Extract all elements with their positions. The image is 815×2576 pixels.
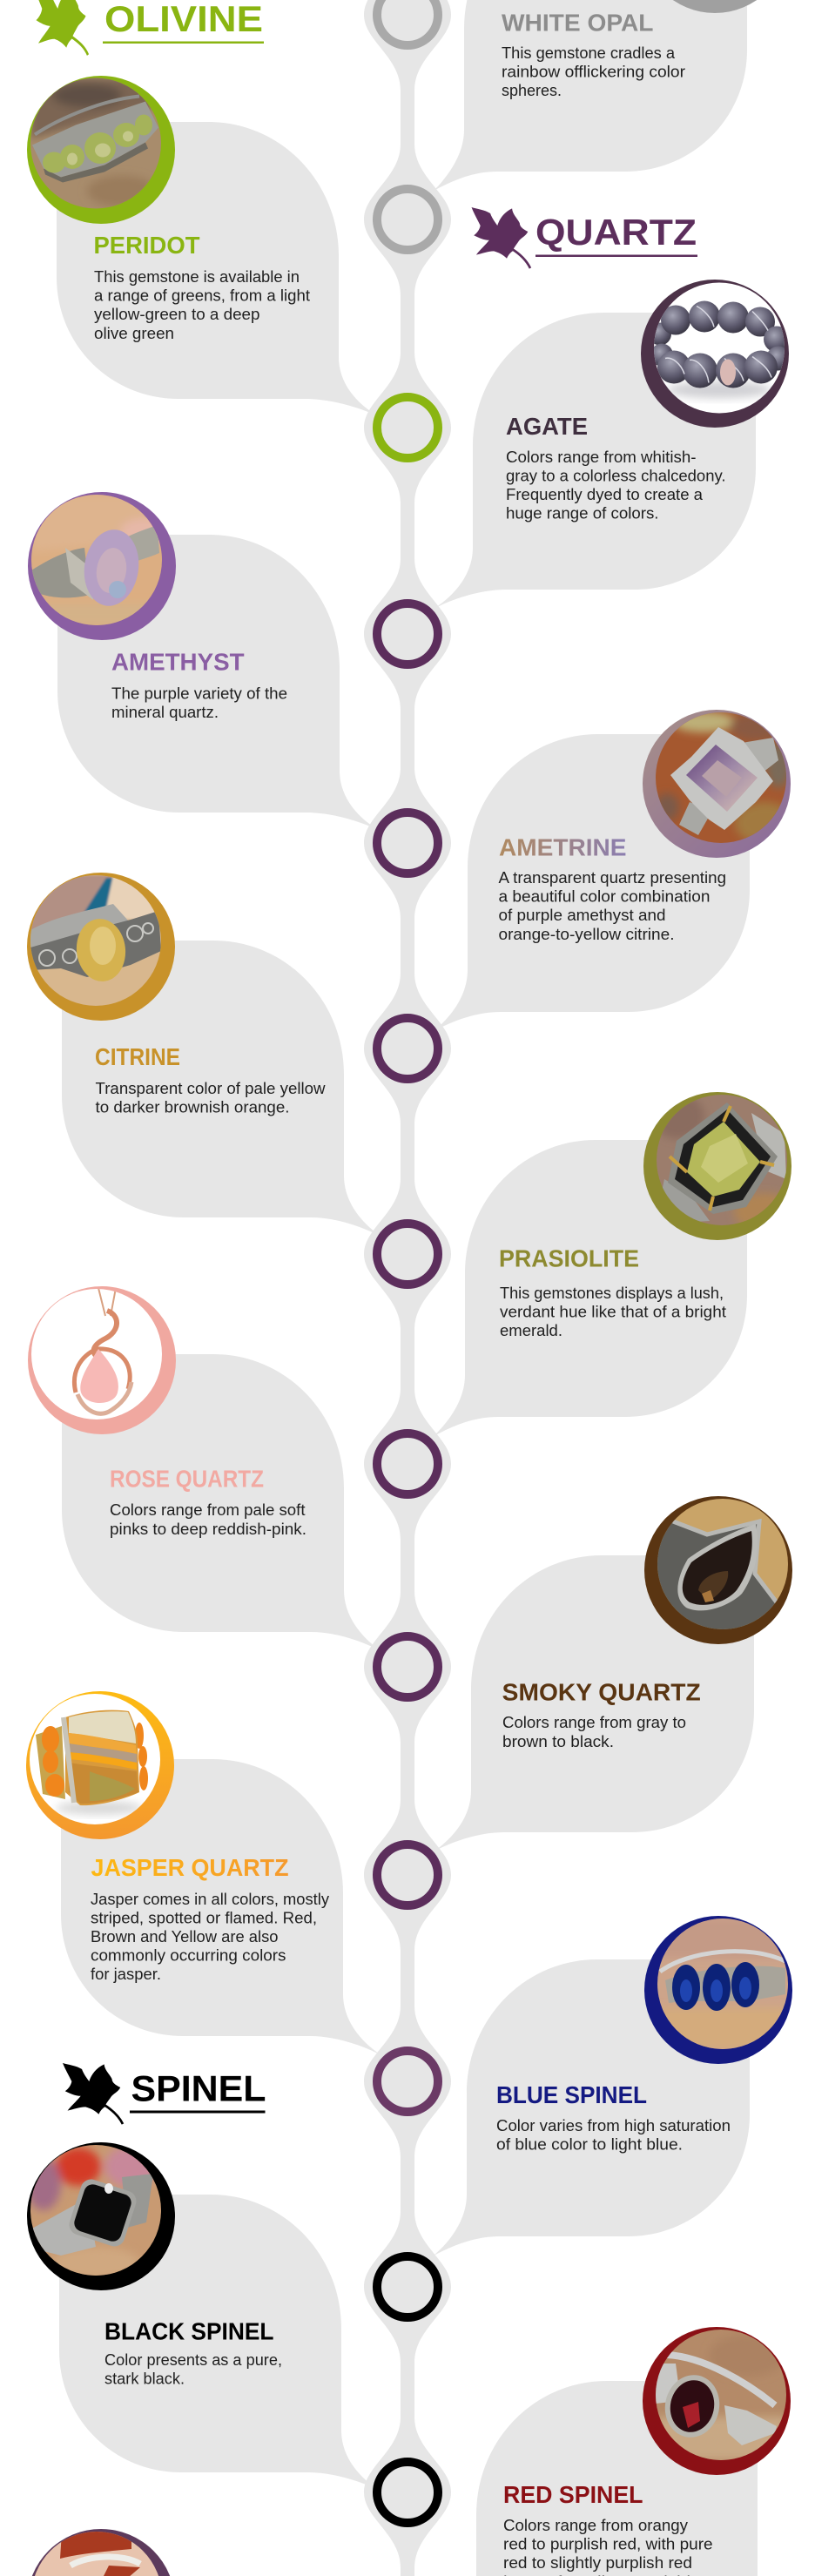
prasiolite description <box>500 1284 726 1339</box>
leaf bubble <box>62 941 381 1237</box>
amethyst name: AMETHYST <box>111 648 245 676</box>
ametrine description <box>498 868 726 943</box>
leaf bubble <box>57 122 381 418</box>
icon: spinel leaf <box>63 2063 123 2124</box>
node: agate <box>377 604 438 664</box>
prasiolite description: verdant hue like that of a bright <box>500 1303 726 1321</box>
node: olivine start <box>377 189 438 250</box>
heading: quartz <box>472 207 697 268</box>
photo frame <box>28 492 176 640</box>
photo frame <box>28 1286 176 1434</box>
panel: agate <box>434 280 791 609</box>
panel: ametrine <box>434 710 794 1031</box>
black spinel description <box>104 2350 282 2388</box>
leaf bubble <box>57 535 381 832</box>
ametrine description: A transparent quartz presenting <box>498 868 726 887</box>
peridot description: yellow-green to a deep <box>94 305 259 323</box>
peridot description: This gemstone is available in <box>94 267 300 286</box>
smoky quartz description <box>502 1713 686 1750</box>
citrine description: to darker brownish orange. <box>96 1097 289 1116</box>
blue spinel description <box>496 2116 731 2154</box>
rose quartz description: Colors range from pale soft <box>110 1500 305 1519</box>
node: blue spinel <box>377 2256 438 2317</box>
photo frame <box>644 1496 792 1644</box>
agate description: Colors range from whitish- <box>506 448 697 466</box>
panel: citrine <box>27 873 381 1237</box>
jasper quartz description: striped, spotted or flamed. Red, <box>91 1909 317 1926</box>
photo frame <box>643 2327 791 2475</box>
agate description <box>506 448 726 523</box>
photo frame <box>27 2142 175 2290</box>
peridot description <box>94 267 310 342</box>
jasper quartz description <box>91 1890 330 1983</box>
photo: amethyst ring <box>31 495 169 625</box>
node: citrine <box>377 1224 438 1285</box>
white opal description: spheres. <box>502 81 562 99</box>
leaf bubble <box>61 1759 381 2055</box>
peridot description: olive green <box>94 324 174 342</box>
photo: red spinel ring <box>656 2330 786 2460</box>
photo: jasper ring <box>30 1694 160 1824</box>
jasper quartz description: Brown and Yellow are also <box>91 1927 279 1945</box>
prasiolite description: emerald. <box>500 1321 562 1339</box>
agate description: Frequently dyed to create a <box>506 485 704 503</box>
photo frame <box>644 1916 792 2064</box>
white opal description: This gemstone cradles a <box>502 44 676 62</box>
panel: prasiolite <box>434 1092 797 1436</box>
leaf bubble <box>434 313 756 609</box>
white opal description: rainbow offlickering color <box>502 63 685 80</box>
jasper quartz name: JASPER QUARTZ <box>91 1854 289 1881</box>
photo frame <box>643 710 791 858</box>
leaf bubble <box>476 2381 758 2576</box>
leaf bubble <box>59 2195 381 2492</box>
red spinel name: RED SPINEL <box>503 2481 643 2508</box>
panel: blue spinel <box>434 1916 792 2256</box>
blue spinel description: Color varies from high saturation <box>496 2116 731 2134</box>
photo circle <box>641 0 789 13</box>
citrine description <box>96 1079 326 1116</box>
agate description: huge range of colors. <box>506 503 658 523</box>
photo frame <box>26 1691 174 1839</box>
red spinel description: red to slightly purplish red <box>503 2553 692 2572</box>
leaf bubble <box>434 0 747 191</box>
olivine underline <box>103 42 264 44</box>
leaf bubble <box>434 1959 750 2256</box>
peridot description: a range of greens, from a light <box>94 286 310 305</box>
leaf bubble <box>434 1140 747 1436</box>
ametrine description: orange-to-yellow citrine. <box>498 925 674 943</box>
blue spinel description: of blue color to light blue. <box>496 2135 683 2154</box>
photo frame <box>27 76 175 224</box>
ametrine description: a beautiful color combination <box>498 887 711 906</box>
icon: olivine leaf <box>34 0 88 55</box>
photo: blue spinel ring <box>657 1919 788 2049</box>
photo: agate bracelet <box>649 282 791 413</box>
photo: rose quartz pendant <box>31 1288 162 1419</box>
citrine name: CITRINE <box>95 1043 180 1070</box>
node: black spinel <box>377 2462 438 2523</box>
panel: red spinel <box>476 2327 791 2576</box>
leaf bubble <box>434 734 750 1031</box>
panel: white opal <box>434 0 789 191</box>
red spinel description <box>503 2516 713 2576</box>
leaf bubble <box>434 1555 754 1851</box>
agate name: AGATE <box>506 413 588 440</box>
photo: black spinel ring <box>26 2145 161 2278</box>
timeline node rings <box>377 0 438 2523</box>
smoky quartz description: Colors range from gray to <box>502 1713 686 1731</box>
panel: peridot <box>27 76 381 418</box>
ametrine name: AMETRINE <box>499 834 627 860</box>
prasiolite description: This gemstones displays a lush, <box>500 1284 724 1302</box>
citrine description: Transparent color of pale yellow <box>96 1079 326 1097</box>
amethyst description: mineral quartz. <box>111 703 219 721</box>
amethyst description: The purple variety of the <box>111 684 287 702</box>
node: peridot <box>377 397 438 458</box>
node: rose quartz <box>377 1636 438 1697</box>
blue spinel name: BLUE SPINEL <box>496 2081 647 2108</box>
panel: smoky quartz <box>434 1496 792 1851</box>
node: ametrine <box>377 1018 438 1079</box>
spinel underline <box>130 2111 265 2113</box>
panel: black spinel <box>26 2142 381 2492</box>
photo: citrine ring <box>30 875 161 1006</box>
panel: next gemstone photo, cut off at page bottom <box>27 2529 175 2576</box>
ametrine description: of purple amethyst and <box>498 906 665 924</box>
panel: jasper quartz <box>26 1691 381 2055</box>
photo frame <box>27 873 175 1021</box>
leaf bubble <box>62 1354 381 1651</box>
photo frame <box>27 2529 175 2576</box>
node: amethyst <box>377 813 438 873</box>
smoky quartz name: SMOKY QUARTZ <box>502 1679 701 1705</box>
jasper quartz description: commonly occurring colors <box>91 1946 286 1965</box>
black spinel description: Color presents as a pure, <box>104 2350 282 2369</box>
quartz title: QUARTZ <box>535 212 697 253</box>
smoky quartz description: brown to black. <box>502 1732 614 1750</box>
photo: prasiolite ring <box>657 1095 787 1225</box>
white opal description <box>502 44 685 99</box>
heading: olivine <box>34 0 264 55</box>
jasper quartz description: for jasper. <box>91 1965 161 1983</box>
photo frame <box>643 1092 791 1240</box>
quartz underline <box>535 254 697 257</box>
photo frame <box>641 280 789 428</box>
rose quartz description: pinks to deep reddish-pink. <box>110 1520 306 1538</box>
prasiolite name: PRASIOLITE <box>499 1245 639 1271</box>
amethyst description <box>111 684 287 721</box>
icon: quartz leaf <box>472 207 530 268</box>
jasper quartz description: Jasper comes in all colors, mostly <box>91 1890 330 1908</box>
rose quartz name: ROSE QUARTZ <box>110 1465 264 1493</box>
panel: rose quartz <box>28 1286 381 1651</box>
spinel title: SPINEL <box>131 2067 266 2109</box>
node: prasiolite <box>377 1433 438 1494</box>
photo: smoky quartz ring <box>653 1499 788 1630</box>
photo: peridot ring <box>30 78 161 209</box>
black spinel description: stark black. <box>104 2369 185 2388</box>
node: jasper quartz <box>377 2051 438 2112</box>
peridot name: PERIDOT <box>94 232 200 259</box>
timeline spine <box>364 0 451 2576</box>
white opal name: WHITE OPAL <box>502 9 653 37</box>
node: white opal <box>377 0 438 45</box>
agate description: gray to a colorless chalcedony. <box>506 467 726 484</box>
rose quartz description <box>110 1500 306 1538</box>
heading: spinel <box>63 2063 266 2124</box>
red spinel description: Colors range from orangy <box>503 2516 689 2534</box>
panel: amethyst <box>28 492 381 832</box>
photo: ring <box>31 2532 162 2576</box>
black spinel name: BLACK SPINEL <box>104 2318 273 2345</box>
photo: ametrine ring <box>655 711 794 844</box>
node: smoky quartz <box>377 1844 438 1905</box>
red spinel description: red to purplish red, with pure <box>503 2534 713 2552</box>
